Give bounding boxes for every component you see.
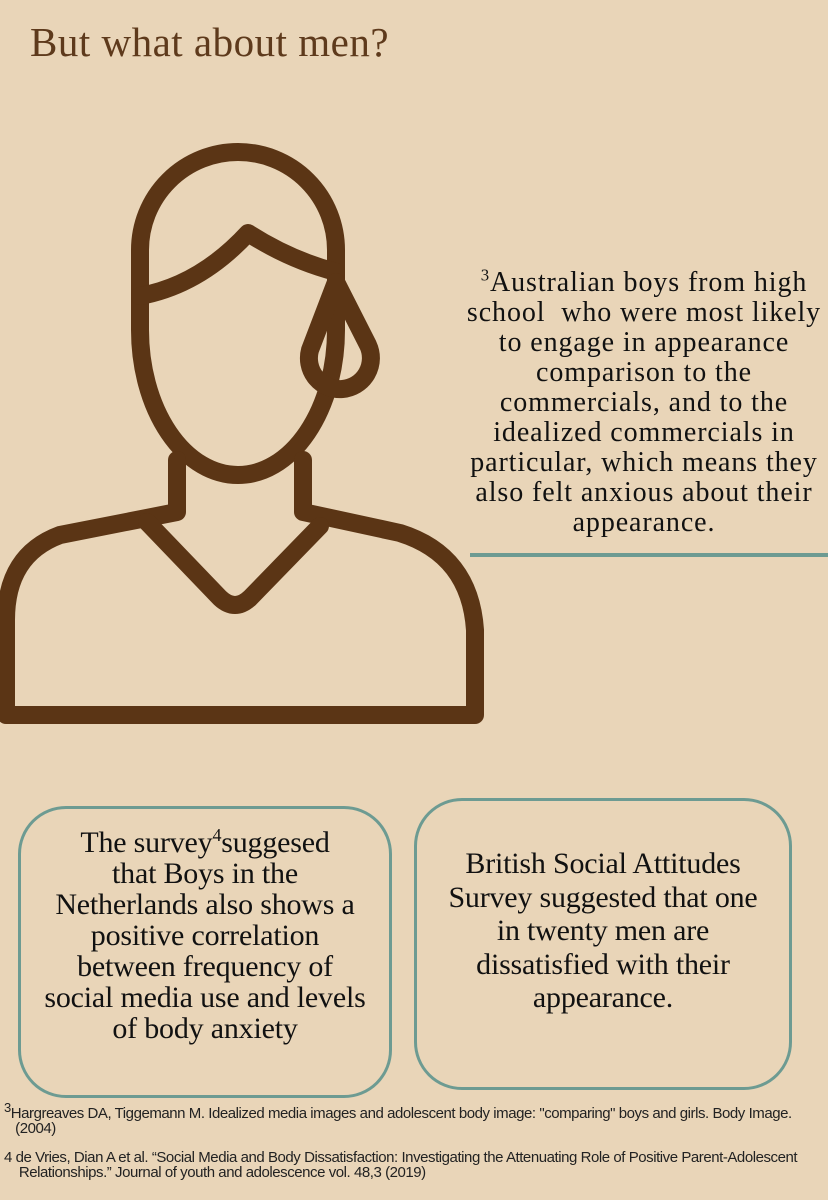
footnote 4: 4 de Vries, Dian A et al. “Social Media and Body Dissatisfaction: Investigating the Attenuating Role of Positive Parent-Adolescent (4, 1149, 797, 1166)
panel: British Social Attitudes: dissatisfied with their (476, 948, 730, 980)
panel: British Social Attitudes: British Social Attitudes (465, 847, 741, 880)
text block: Australian boys: idealized commercials in (493, 417, 795, 448)
panel: Netherlands survey: that Boys in the (112, 857, 298, 890)
hair (140, 233, 336, 296)
panel: Netherlands survey: between frequency of (77, 950, 333, 983)
footnote 3 (4, 1100, 792, 1137)
footnote 4: Relationships.” Journal of youth and adolescence vol. 48,3 (2019) (19, 1164, 426, 1181)
panel: British Social Attitudes: appearance. (533, 981, 673, 1014)
sweat drop (309, 282, 371, 389)
divider line teal (470, 553, 828, 557)
panel: Netherlands survey: Netherlands also shows a (55, 888, 355, 921)
text block: Australian boys: particular, which means they (470, 447, 818, 478)
footnote 4 (4, 1149, 798, 1181)
text block: Australian boys: to engage in appearance (499, 327, 789, 358)
text block: Australian boys: also felt anxious about their (475, 477, 813, 508)
panel: Netherlands survey: of body anxiety (112, 1012, 298, 1045)
panel: Netherlands survey: The survey4suggesed (80, 825, 330, 859)
icon: anxious man with sweat drop (0, 143, 484, 724)
panel: Netherlands survey: positive correlation (91, 919, 319, 952)
panel: Netherlands survey: social media use and levels (44, 981, 366, 1014)
neck and body (6, 460, 475, 715)
text block: Australian boys: appearance. (573, 507, 715, 538)
footnote 3: 3Hargreaves DA, Tiggemann M. Idealized media images and adolescent body image: "comparing" boys and girls. Body Image. (4, 1100, 792, 1122)
panel: Netherlands survey (18, 806, 392, 1098)
text block: Australian boys: school who were most likely (467, 297, 821, 328)
head (140, 152, 336, 475)
title: But what about men? (30, 19, 389, 65)
text block: Australian boys: 3Australian boys from high (481, 266, 807, 298)
footnote 3: (2004) (15, 1120, 56, 1137)
text block: Australian boys: comparison to the (536, 357, 752, 388)
panel: British Social Attitudes: Survey suggested that one (448, 880, 758, 914)
panel: British Social Attitudes (414, 798, 792, 1090)
text block: Australian boys (467, 266, 821, 538)
text block: Australian boys: commercials, and to the (500, 387, 788, 418)
panel: British Social Attitudes: in twenty men are (497, 914, 709, 947)
